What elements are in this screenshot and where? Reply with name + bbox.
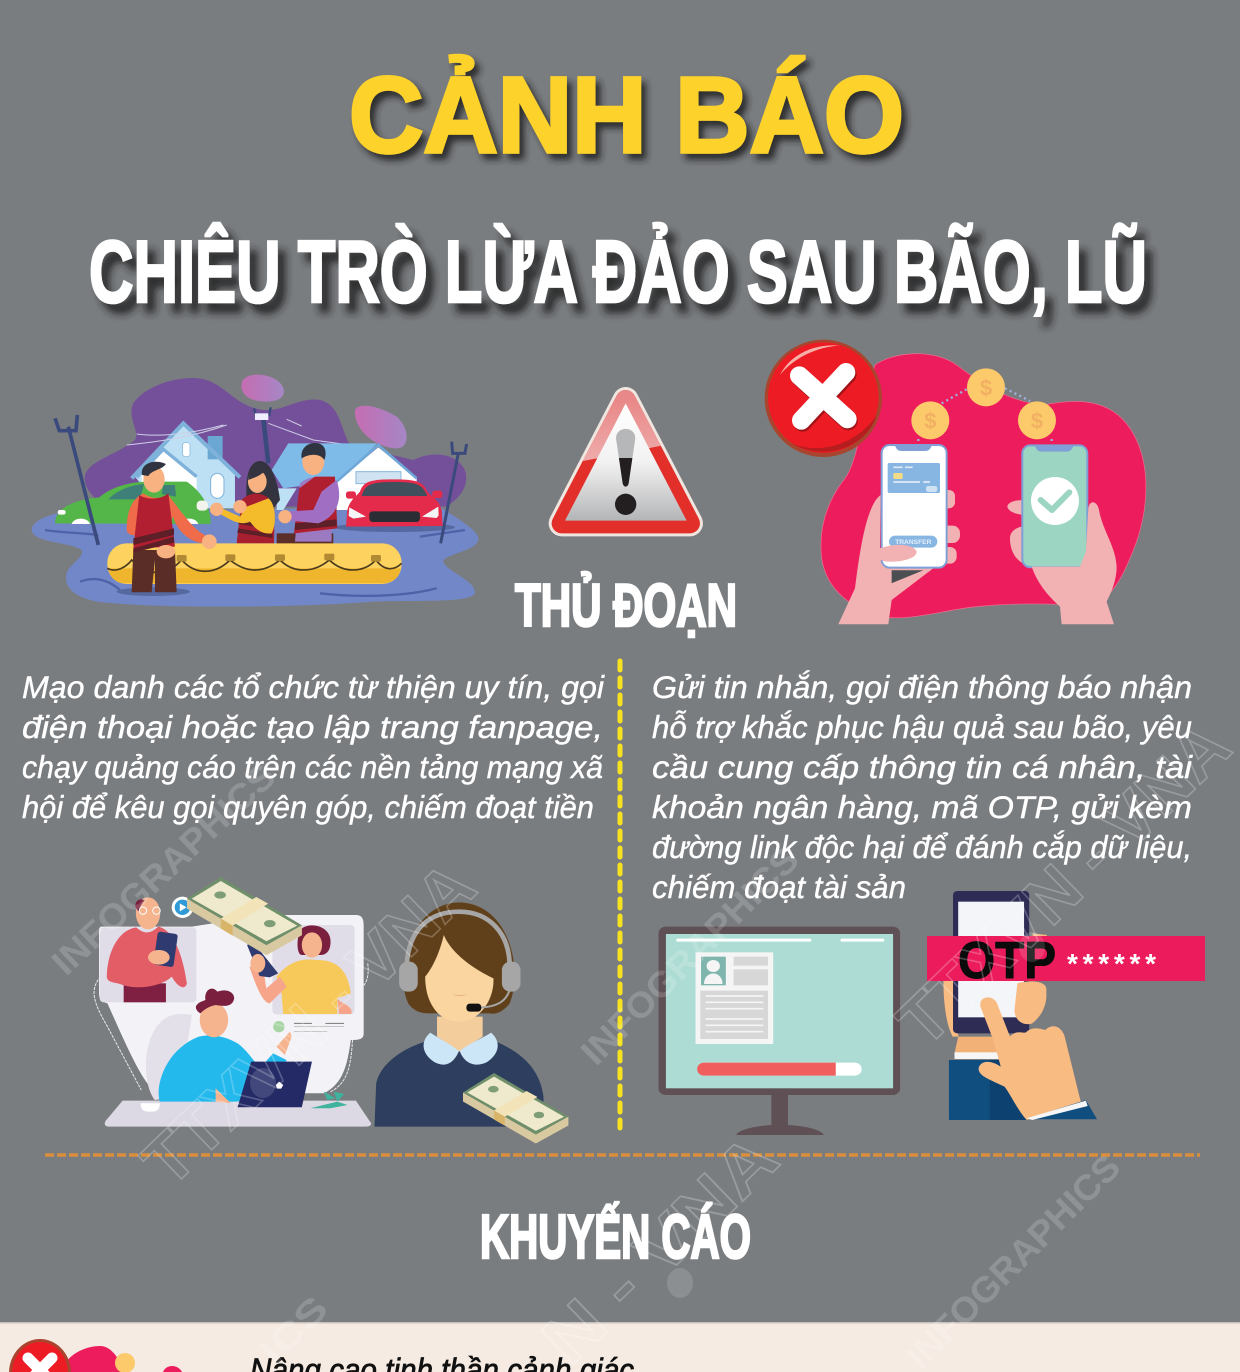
pink blob (821, 354, 1146, 618)
text block: right description: đường link độc hại để đánh cắp dữ liệu, (652, 829, 1192, 865)
watermarks: INFOGRAPHICS (43, 755, 284, 983)
heading: khuyen cao: KHUYẾN CÁO (480, 1203, 751, 1272)
woman (210, 461, 280, 543)
left phone hand: TRANSFER (895, 539, 932, 546)
divider: horizontal dashed (45, 1153, 1200, 1157)
coin dollar signs: $ (980, 376, 992, 401)
coin dollar signs (924, 376, 1043, 433)
right house (272, 443, 377, 488)
red x badge (765, 340, 882, 457)
coin dots (918, 388, 1052, 443)
green car (55, 482, 211, 524)
cup (141, 1103, 160, 1112)
text block: right description: cầu cung cấp thông tin cá nhân, tài (652, 749, 1193, 785)
text block: left description: Mạo danh các tổ chức từ thiện uy tín, gọi (22, 669, 605, 705)
wires (127, 419, 367, 447)
text block: left description: điện thoại hoặc tạo lập trang fanpage, (22, 709, 603, 745)
watermarks: TTXVN - VNA (128, 847, 490, 1201)
divider: vertical dotted (618, 661, 622, 1128)
man laptop (146, 989, 312, 1107)
coin dollar signs: $ (1031, 408, 1043, 433)
right phone hand (1007, 445, 1117, 624)
red car (335, 479, 455, 532)
icon: money stack bottom (463, 1073, 568, 1144)
white backdrop (99, 915, 364, 1093)
text block: right description (652, 669, 1193, 905)
coin small (115, 1353, 135, 1372)
watermarks: INFOGRAPHICS (898, 1146, 1128, 1372)
text block: left description: hội để kêu gọi quyên góp, chiếm đoạt tiền (22, 789, 594, 825)
man left (117, 462, 217, 596)
illustration: flood rescue (32, 375, 478, 607)
text block: left description (22, 669, 605, 825)
purple cloud (85, 378, 466, 507)
man right (277, 443, 339, 544)
red x badge small (9, 1339, 71, 1372)
coins (911, 368, 1056, 439)
otp banner: OTP (958, 932, 1056, 990)
pink blob small (62, 1346, 124, 1372)
illustration: monitor (658, 927, 900, 1135)
left phone hand (838, 445, 960, 624)
text block: right description: chiếm đoạt tài sản (652, 869, 906, 905)
watermarks: TTXVN - VNA (883, 707, 1240, 1061)
illustration: hand with phone and otp (943, 891, 1097, 1120)
poles (55, 415, 98, 545)
title: CẢNH BÁO (349, 54, 904, 175)
plant (310, 1092, 347, 1108)
watermarks (43, 707, 1240, 1372)
text block: right description: Gửi tin nhắn, gọi điện thông báo nhận (652, 669, 1192, 705)
panel left person (100, 897, 196, 1002)
panel: bottom recommendation (0, 1322, 1240, 1372)
coin dollar signs: $ (924, 408, 936, 433)
watermarks: ICS (252, 1288, 336, 1372)
illustration: money transfer phones (765, 340, 1146, 624)
text block: right description: hỗ trợ khắc phục hậu quả sau bão, yêu (652, 709, 1192, 745)
left house (135, 425, 235, 508)
otp banner (927, 932, 1205, 990)
otp banner: ****** (1067, 948, 1156, 979)
watermarks: N - VNA (528, 1119, 793, 1372)
heading: thu doan: THỦ ĐOẠN (515, 572, 737, 639)
text block: right description: khoản ngân hàng, mã OTP, gửi kèm (652, 789, 1192, 825)
illustration: call center agent (374, 902, 543, 1127)
middle pole (263, 418, 268, 463)
illustration: video call scam (94, 897, 371, 1127)
watermarks: INFOGRAPHICS (573, 839, 807, 1073)
icon: money stack top (187, 877, 302, 955)
desk (105, 1101, 371, 1127)
panel right person (247, 925, 355, 1032)
icon: warning triangle (562, 400, 690, 523)
flood water (32, 507, 478, 607)
inflatable boat (107, 543, 402, 584)
text block: left description: chạy quảng cáo trên các nền tảng mạng xã (22, 749, 603, 785)
